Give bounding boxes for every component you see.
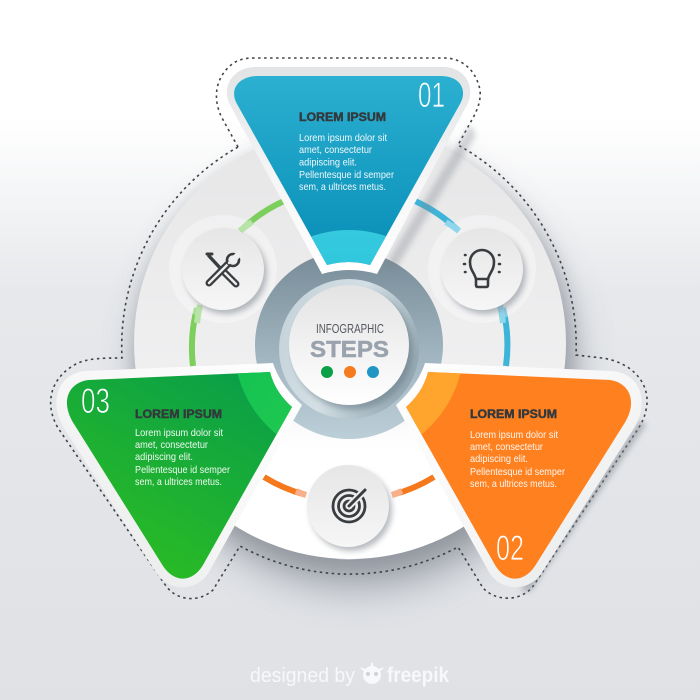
- text block 01: sem, a ultrices metus.: [299, 181, 386, 193]
- main disc: [134, 127, 566, 559]
- disc shadow: [137, 136, 574, 588]
- text block 03: amet, consectetur: [135, 439, 208, 451]
- legend dots: [321, 366, 379, 378]
- text block 02: sem, a ultrices metus.: [470, 478, 557, 490]
- panel: step 01 blue: [227, 67, 478, 274]
- watermark: designed by: [250, 665, 355, 687]
- icon button: tools: [169, 215, 277, 323]
- text block 03: sem, a ultrices metus.: [135, 476, 222, 488]
- panel: step 02 orange: [396, 363, 647, 594]
- icon button: idea: [428, 215, 536, 323]
- text block 02: amet, consectetur: [470, 441, 543, 453]
- arc: blue lower: [503, 308, 507, 366]
- text block 03: adipiscing elit.: [135, 451, 193, 463]
- arc: orange left: [264, 477, 306, 495]
- arc: green upper: [240, 201, 284, 231]
- heading 03: LOREM IPSUM: [135, 409, 222, 421]
- watermark: [250, 663, 449, 687]
- ring arcs: [192, 201, 507, 495]
- icon: crossed tools: [207, 252, 241, 284]
- text block 01: Lorem ipsum dolor sit: [299, 132, 387, 144]
- title: infographic: INFOGRAPHIC: [316, 322, 384, 336]
- text block 03: Lorem ipsum dolor sit: [135, 427, 223, 439]
- arc: green lower: [192, 308, 197, 366]
- title: steps: STEPS: [310, 336, 389, 362]
- text block 01: Pellentesque id semper: [299, 169, 394, 181]
- dashed outline: [51, 58, 647, 599]
- number 03: 03: [81, 382, 110, 421]
- text block 03: Pellentesque id semper: [135, 464, 230, 476]
- text block 01: adipiscing elit.: [299, 156, 357, 168]
- icon: target: [333, 490, 365, 522]
- arc: orange right: [392, 477, 434, 495]
- text block 02: Pellentesque id semper: [470, 466, 565, 478]
- number 02: 02: [496, 529, 524, 568]
- heading 01: LOREM IPSUM: [299, 112, 386, 124]
- text block 01: amet, consectetur: [299, 144, 372, 156]
- icon: light bulb: [464, 250, 500, 287]
- panel: step 03 green: [56, 363, 302, 587]
- center ring: [255, 251, 443, 439]
- text block 02: Lorem ipsum dolor sit: [470, 429, 558, 441]
- number 01: 01: [418, 76, 445, 115]
- arc: blue upper: [415, 201, 459, 231]
- heading 02: LOREM IPSUM: [470, 409, 557, 421]
- logo mark: [361, 663, 383, 684]
- center circle: [289, 285, 413, 410]
- text block 02: adipiscing elit.: [470, 453, 528, 465]
- icon button: target: [294, 452, 402, 560]
- watermark: freepik: [387, 664, 449, 687]
